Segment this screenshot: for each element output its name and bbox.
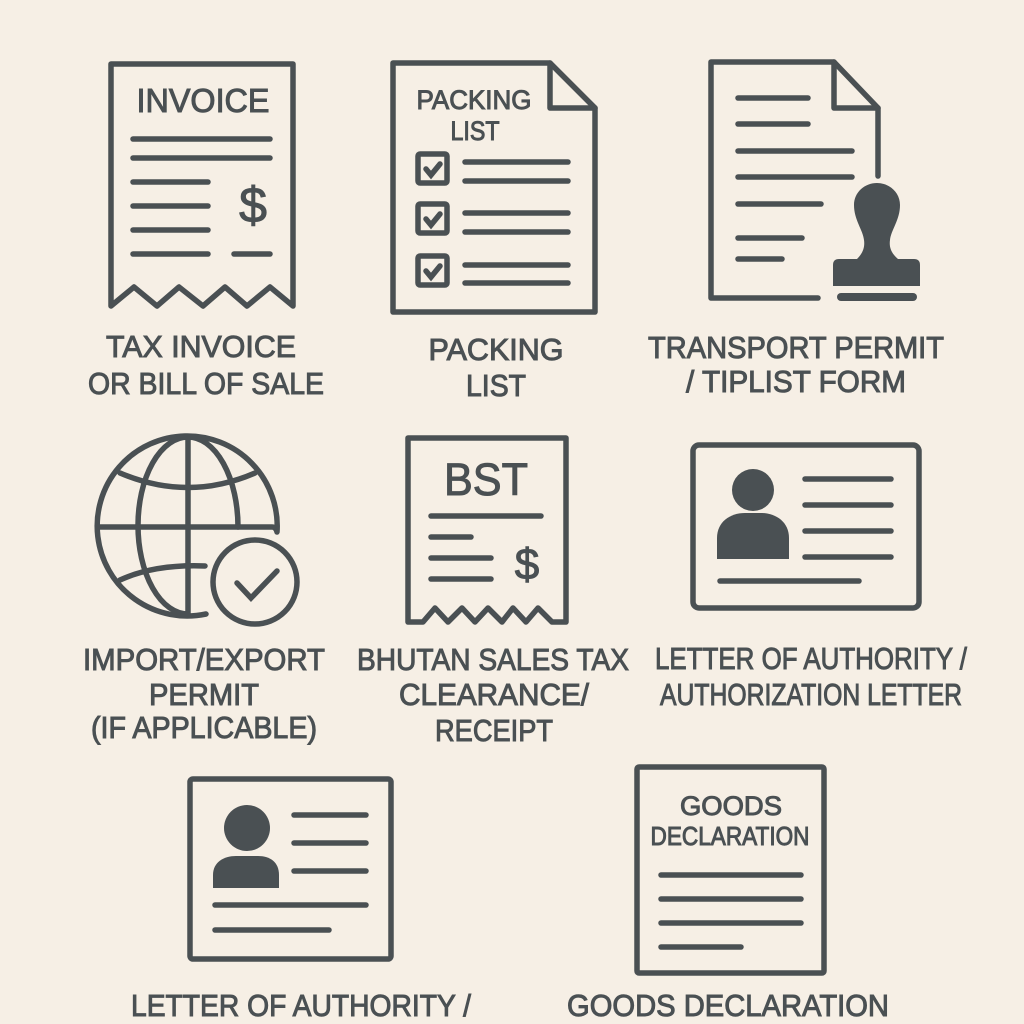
icon: BST receipt: $: [515, 540, 539, 589]
label: letter of authority, cut off at bottom: LETTER OF AUTHORITY /: [131, 988, 471, 1023]
label: bhutan sales tax: [357, 642, 629, 748]
label: transport permit: / TIPLIST FORM: [686, 364, 906, 399]
label: transport permit: TRANSPORT PERMIT: [648, 330, 944, 365]
icon: packing list: LIST: [450, 116, 500, 146]
label: packing list: LIST: [466, 368, 526, 403]
icon: packing list: PACKING: [416, 85, 532, 115]
label: bhutan sales tax: CLEARANCE/: [399, 677, 589, 712]
icon: invoice receipt: INVOICE: [136, 82, 270, 119]
label: import/export permit: (IF APPLICABLE): [91, 710, 317, 745]
icon: invoice receipt: [111, 64, 293, 306]
label: transport permit: [648, 330, 944, 399]
label: packing list: [428, 332, 564, 403]
label: tax invoice: [88, 329, 324, 401]
label: packing list: PACKING: [428, 332, 564, 367]
icon: invoice receipt: $: [239, 177, 267, 233]
icon: BST receipt: BST: [444, 454, 528, 505]
icon: goods declaration: GOODS: [680, 791, 782, 821]
label: goods declaration: GOODS DECLARATION: [567, 988, 889, 1023]
icon: ID document: [190, 779, 391, 959]
label: tax invoice: TAX INVOICE: [106, 329, 296, 364]
label: import/export permit: IMPORT/EXPORT: [83, 642, 325, 677]
icon: transport permit with stamp: [711, 62, 920, 298]
icon: goods declaration: DECLARATION: [650, 821, 810, 851]
icon: BST receipt: [408, 438, 566, 622]
label: import/export permit: PERMIT: [149, 677, 259, 712]
icon: ID card: [693, 445, 919, 608]
label: bhutan sales tax: RECEIPT: [435, 713, 553, 748]
icon: goods declaration: [637, 767, 824, 973]
icon: globe with check badge: [97, 436, 297, 624]
label: letter of authority: LETTER OF AUTHORITY /: [655, 641, 967, 676]
label: bhutan sales tax: BHUTAN SALES TAX: [357, 642, 629, 677]
label: letter of authority: [655, 641, 967, 712]
icon: packing list: [393, 63, 595, 312]
label: tax invoice: OR BILL OF SALE: [88, 366, 324, 401]
label: import/export permit: [83, 642, 325, 745]
